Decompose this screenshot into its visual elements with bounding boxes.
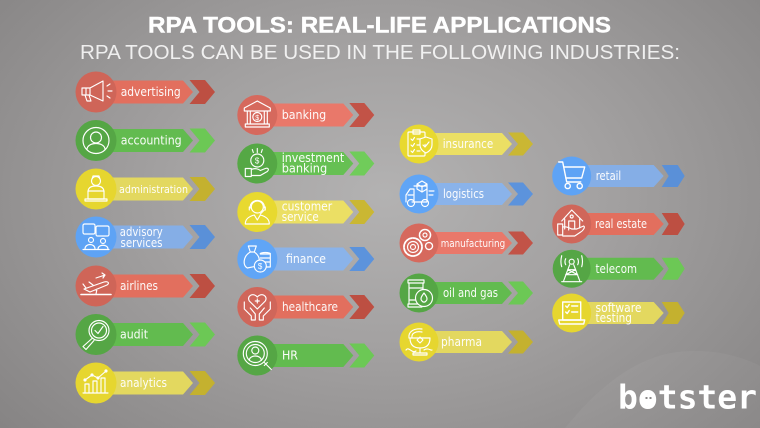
item: advertising: advertising (121, 85, 181, 99)
column 2 (237, 95, 374, 376)
item: customer service (237, 192, 374, 232)
item: advisory services: services (120, 236, 162, 250)
item: customer service: service (282, 210, 319, 224)
item: healthcare: healthcare (282, 300, 338, 314)
item: insurance: insurance (443, 137, 493, 151)
item: real estate: real estate (595, 217, 647, 231)
item: finance: finance (286, 252, 326, 266)
item: finance (237, 239, 374, 279)
item: pharma (400, 322, 533, 362)
item: manufacturing: manufacturing (441, 238, 505, 250)
item: investment banking: investment (282, 151, 344, 165)
item: software testing: software (596, 301, 642, 315)
item: audit (76, 314, 215, 355)
logo: botster: botster (618, 378, 757, 416)
item: telecom: telecom (596, 262, 637, 276)
item: administration (76, 168, 215, 210)
item: insurance (400, 124, 533, 164)
item: analytics: analytics (120, 376, 167, 390)
item: software testing: testing (596, 311, 632, 325)
item: accounting (76, 120, 215, 161)
item: manufacturing (400, 224, 533, 262)
item: banking (237, 95, 374, 135)
corner swoosh (565, 351, 760, 428)
item: pharma: pharma (441, 335, 482, 349)
subtitle: RPA TOOLS CAN BE USED IN THE FOLLOWING INDUSTRIES: (80, 42, 680, 64)
item: administration: administration (119, 184, 188, 196)
column 1 (76, 72, 215, 404)
item: HR (237, 336, 374, 376)
title: RPA TOOLS: REAL-LIFE APPLICATIONS (148, 12, 611, 37)
item: retail: retail (596, 169, 621, 183)
item: advisory services (76, 216, 215, 258)
item: healthcare (237, 287, 374, 327)
item: logistics (400, 174, 533, 214)
item: investment banking: banking (282, 162, 327, 176)
item: audit: audit (120, 328, 148, 342)
item: finance: $ (258, 262, 263, 271)
item: investment banking (237, 144, 374, 184)
item: advisory services: advisory (120, 225, 163, 239)
item: oil and gas (400, 274, 533, 312)
item: software testing (552, 294, 685, 332)
item: banking: $ (255, 115, 259, 122)
item: real estate (552, 204, 685, 244)
item: banking: banking (282, 108, 326, 122)
item: oil and gas: oil and gas (443, 286, 498, 300)
item: retail (552, 156, 685, 196)
item: logistics: logistics (443, 187, 484, 201)
column 4 (552, 156, 685, 332)
item: HR: HR (282, 349, 298, 363)
item: airlines: airlines (120, 279, 158, 293)
item: accounting: accounting (121, 134, 182, 148)
item: customer service: customer (282, 200, 332, 214)
item: investment banking: $ (255, 156, 260, 166)
item: telecom (553, 250, 685, 288)
column 3 (400, 124, 533, 362)
item: analytics (76, 362, 215, 404)
item: advertising (76, 72, 215, 112)
item: airlines (76, 266, 215, 306)
